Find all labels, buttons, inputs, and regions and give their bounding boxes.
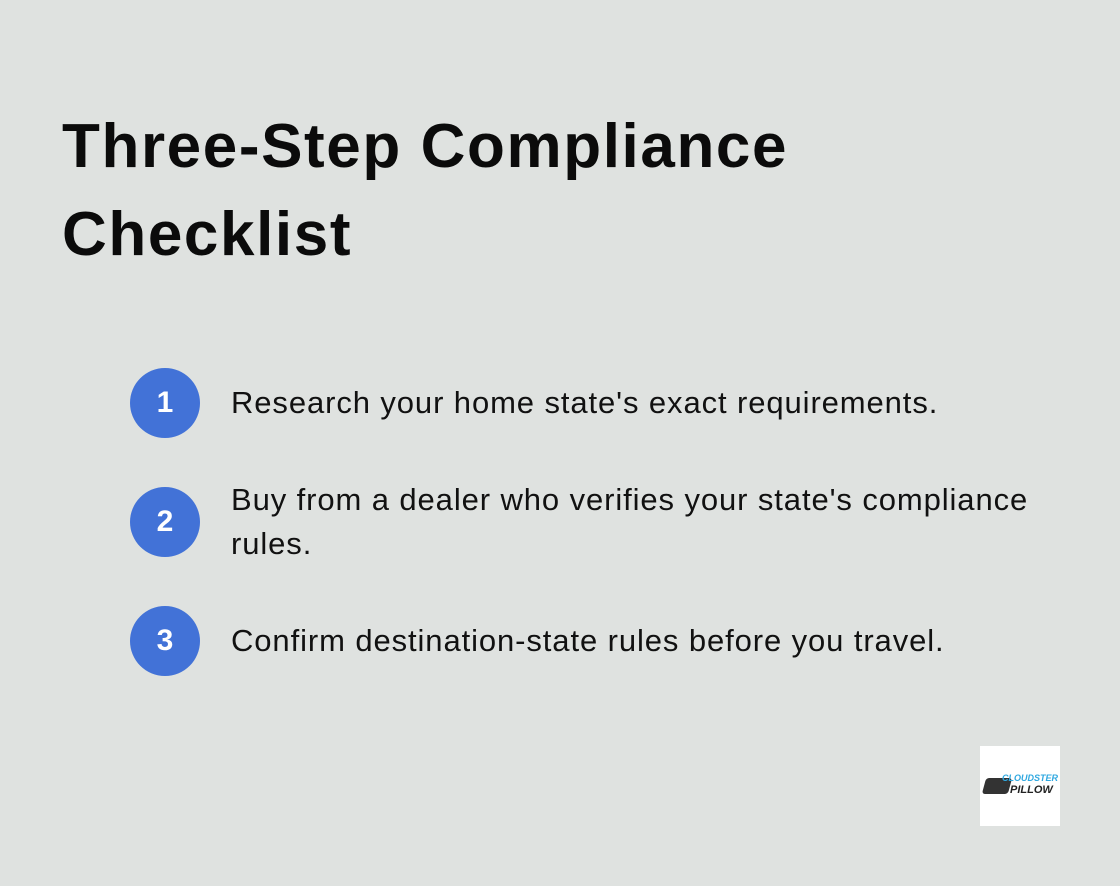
step 1 bbox=[130, 368, 938, 438]
title: Three-Step Compliance bbox=[62, 112, 788, 181]
text 2: Buy from a dealer who verifies your state's compliance rules. bbox=[231, 482, 1028, 561]
logo: CLOUDSTER bbox=[1002, 773, 1058, 783]
title: Checklist bbox=[62, 200, 352, 269]
title bbox=[62, 112, 788, 269]
logo bbox=[980, 746, 1060, 826]
step 2 bbox=[130, 482, 1028, 561]
text 1: Research your home state's exact requirements. bbox=[231, 385, 938, 420]
icon: number 2 bbox=[130, 487, 200, 557]
icon: number 1: 1 bbox=[157, 386, 173, 419]
icon: number 2: 2 bbox=[157, 505, 173, 538]
logo: PILLOW bbox=[1010, 784, 1053, 796]
step 3 bbox=[130, 606, 945, 676]
text 3: Confirm destination-state rules before you travel. bbox=[231, 623, 945, 658]
icon: number 1 bbox=[130, 368, 200, 438]
icon: number 3 bbox=[130, 606, 200, 676]
icon: number 3: 3 bbox=[157, 624, 173, 657]
